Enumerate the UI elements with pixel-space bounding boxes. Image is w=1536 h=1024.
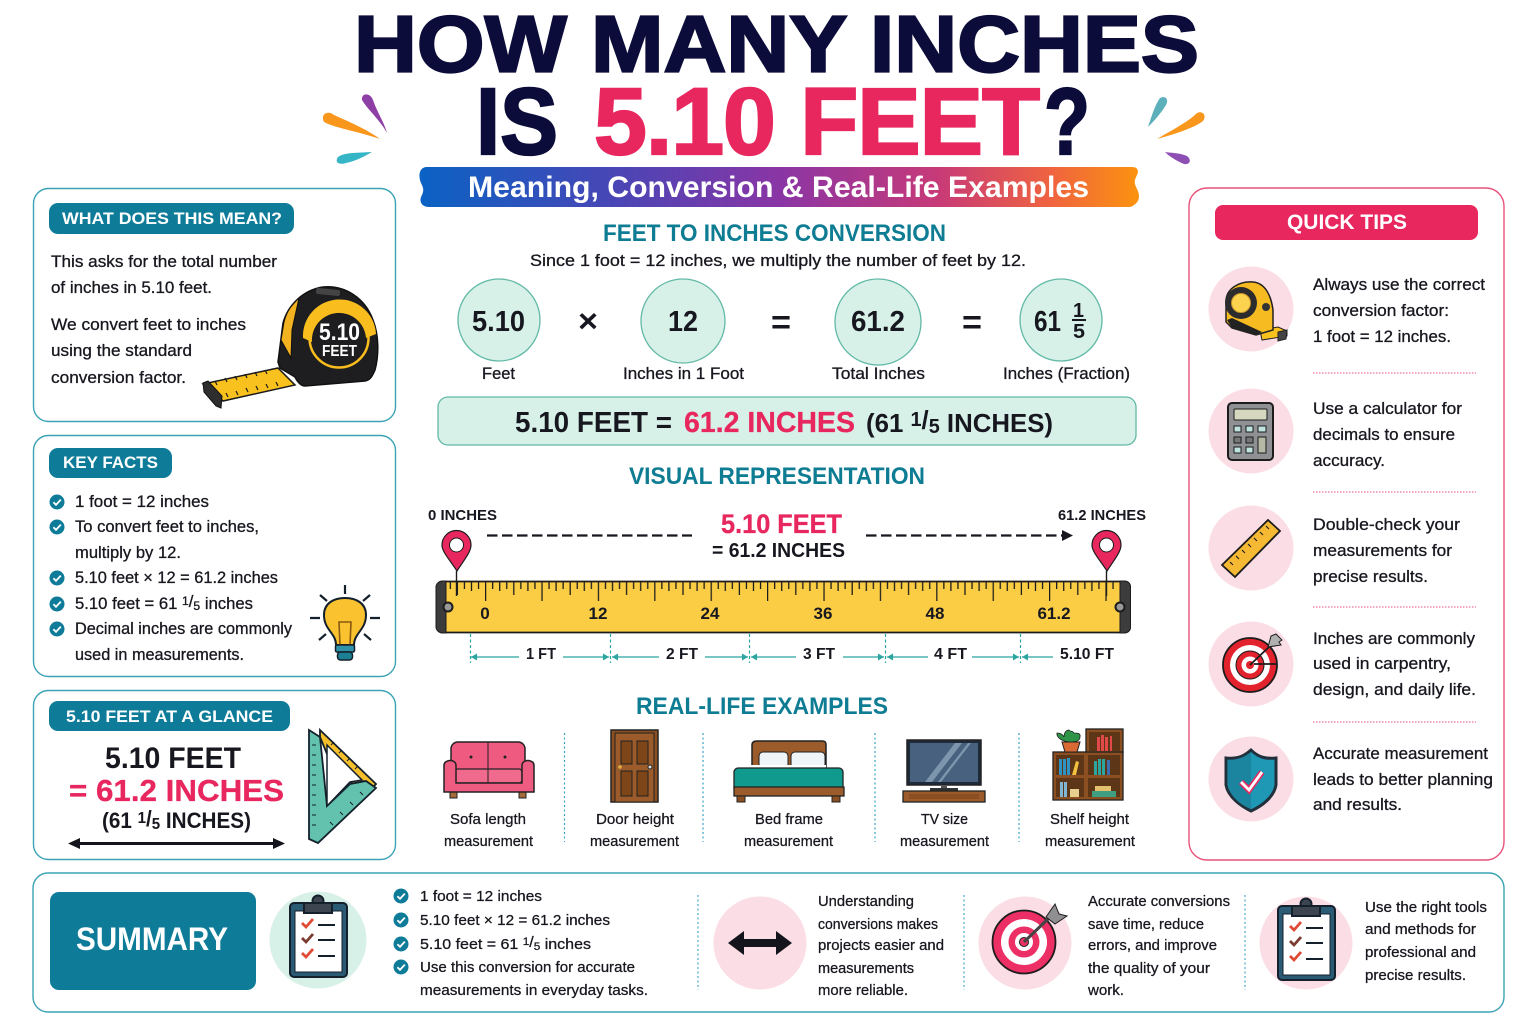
foot markers: 4 FT <box>934 646 967 663</box>
panel: key facts: 5.10 feet × 12 = 61.2 inches <box>75 569 278 587</box>
real-life examples row: measurement <box>744 833 834 850</box>
equation row: 5 <box>1073 321 1085 343</box>
summary checklist: Use this conversion for accurate <box>420 959 635 976</box>
panel: key facts: Decimal inches are commonly <box>75 620 293 638</box>
tip text 1: 1 foot = 12 inches. <box>1313 328 1451 346</box>
panel: at a glance <box>34 690 396 860</box>
title: ? <box>1044 69 1090 175</box>
summary checklist: 1 <box>523 936 529 948</box>
tip text 2 <box>1313 400 1463 470</box>
equation row: 12 <box>668 306 698 338</box>
heading: real-life examples: REAL-LIFE EXAMPLES <box>636 693 888 720</box>
tip text 5: leads to better planning <box>1313 771 1493 789</box>
icon: clipboard <box>270 892 366 988</box>
summary text: accuracy: the quality of your <box>1088 960 1210 977</box>
panel: quick tips: QUICK TIPS <box>1287 211 1407 234</box>
panel: what does this mean: conversion factor. <box>51 369 186 387</box>
summary checklist <box>394 888 648 999</box>
result banner: / <box>922 405 929 435</box>
tip text 3: Double-check your <box>1313 516 1461 534</box>
title: IS <box>476 69 558 175</box>
foot markers: 5.10 FT <box>1060 646 1114 663</box>
panel: key facts: / <box>189 593 194 611</box>
real-life examples row: measurement <box>900 833 990 850</box>
tip text 4: used in carpentry, <box>1313 655 1451 673</box>
icon: target <box>978 896 1072 990</box>
tip text 3: precise results. <box>1313 568 1428 586</box>
panel: at a glance: = 61.2 INCHES <box>69 773 284 808</box>
title: HOW MANY INCHES <box>354 0 1199 88</box>
panel: summary: SUMMARY <box>76 921 228 957</box>
icon: sofa <box>444 742 534 798</box>
result banner: 61.2 INCHES <box>684 407 855 439</box>
real-life examples row: Shelf height <box>1050 811 1130 828</box>
real-life examples row: Bed frame <box>755 811 823 828</box>
tip text 4: design, and daily life. <box>1313 681 1476 699</box>
summary checklist: 5.10 feet = 61 <box>420 936 512 953</box>
summary text: conversions: projects easier and <box>818 937 944 954</box>
ruler bar: 36 <box>814 604 832 623</box>
summary text: conversions: measurements <box>818 960 914 977</box>
tip 1 <box>1208 266 1294 352</box>
real-life examples row <box>444 729 1136 850</box>
heading: visual representation: VISUAL REPRESENTATION <box>629 463 925 490</box>
summary text: tools: professional and <box>1365 944 1476 961</box>
conversion explanation: Since 1 foot = 12 inches, we multiply the number of feet by 12. <box>530 252 1026 270</box>
result banner: (61 <box>866 408 904 438</box>
icon: clipboard 2 <box>1260 896 1352 990</box>
equation row: Inches (Fraction) <box>1003 365 1130 383</box>
icon: light bulb <box>310 585 380 660</box>
summary text: conversions: Understanding <box>818 893 914 910</box>
tip text 2: Use a calculator for <box>1313 400 1463 418</box>
tip text 5 <box>1313 745 1493 814</box>
panel: key facts: used in measurements. <box>75 646 244 664</box>
tip text 4 <box>1313 630 1476 699</box>
summary checklist: 5 <box>534 941 540 953</box>
summary text: accuracy: Accurate conversions <box>1088 893 1230 910</box>
foot markers: 3 FT <box>803 646 835 663</box>
panel: key facts: 1 foot = 12 inches <box>75 493 209 511</box>
tip 3 <box>1208 506 1294 590</box>
summary text: conversions: conversions makes <box>818 916 938 933</box>
subtitle ribbon: Meaning, Conversion & Real-Life Examples <box>468 171 1089 204</box>
equation row <box>458 279 1130 383</box>
panel: key facts: To convert feet to inches, <box>75 518 259 536</box>
ruler diagram: 61.2 INCHES <box>1058 507 1146 524</box>
summary text: accuracy <box>1087 893 1230 999</box>
panel: at a glance: INCHES) <box>160 808 251 833</box>
summary text: accuracy: work. <box>1087 982 1124 999</box>
real-life examples row: Sofa length <box>450 811 526 828</box>
panel: key facts: 1 <box>182 594 189 608</box>
summary text: tools: precise results. <box>1365 967 1466 984</box>
real-life examples row: TV size <box>921 811 968 828</box>
title <box>354 0 1199 175</box>
equation row: 61 <box>1034 306 1061 338</box>
tip text 2: decimals to ensure <box>1313 426 1455 444</box>
ruler bar: 0 <box>480 604 490 623</box>
panel: key facts: KEY FACTS <box>63 453 158 472</box>
result banner: 5.10 FEET = <box>515 407 672 439</box>
panel: what does this mean: This asks for the total number <box>51 253 278 271</box>
tip 4 <box>1208 622 1294 706</box>
equation row: 5.10 <box>472 306 525 338</box>
result banner: 1 <box>910 409 922 431</box>
tip text 5: and results. <box>1313 796 1402 814</box>
panel: at a glance: 5.10 FEET <box>105 742 241 775</box>
icon: door <box>611 730 658 802</box>
ruler bar: 24 <box>701 604 720 623</box>
icon: tape measure: FEET <box>322 343 357 360</box>
equation row: = <box>962 304 982 340</box>
double arrow <box>68 838 285 849</box>
panel: quick tips <box>1189 188 1504 860</box>
tip text 2: accuracy. <box>1313 452 1385 470</box>
summary checklist: measurements in everyday tasks. <box>420 982 648 999</box>
panel: key facts: multiply by 12. <box>75 544 181 562</box>
summary checklist: / <box>529 934 535 951</box>
summary text: tools <box>1365 899 1487 984</box>
equation row: Total Inches <box>832 365 925 383</box>
equation row: = <box>771 304 791 340</box>
icon: bookshelf <box>1053 729 1123 800</box>
ruler bar: 48 <box>926 604 944 623</box>
equation row: Inches in 1 Foot <box>623 365 744 383</box>
heading: feet to inches conversion: FEET TO INCHES CONVERSION <box>603 220 946 247</box>
equation row: 61.2 <box>851 306 905 338</box>
icon: set square <box>309 730 376 843</box>
tip 5 <box>1208 736 1294 822</box>
panel: what does this mean <box>34 188 396 422</box>
result banner <box>438 397 1136 445</box>
icon: tv <box>903 740 985 802</box>
tip text 3: measurements for <box>1313 542 1453 560</box>
tip text 3 <box>1313 516 1461 586</box>
real-life examples row: Door height <box>596 811 675 828</box>
tip text 1 <box>1313 276 1485 346</box>
summary checklist: 1 foot = 12 inches <box>420 888 542 905</box>
panel: what does this mean: We convert feet to inches <box>51 316 246 334</box>
result banner: INCHES) <box>940 408 1053 438</box>
summary text: tools: and methods for <box>1365 921 1476 938</box>
ruler diagram: 5.10 FEET <box>721 509 842 539</box>
foot markers: 1 FT <box>526 646 556 663</box>
foot markers <box>470 634 1114 663</box>
icon: end pin <box>1092 530 1121 596</box>
summary text: conversions: more reliable. <box>818 982 908 999</box>
panel: at a glance: / <box>146 806 152 831</box>
panel: at a glance: 1 <box>138 810 146 827</box>
tip text 4: Inches are commonly <box>1313 630 1476 648</box>
real-life examples row: measurement <box>444 833 534 850</box>
icon: tape measure <box>203 287 378 408</box>
panel: at a glance: 5.10 FEET AT A GLANCE <box>66 707 273 726</box>
panel: what does this mean: using the standard <box>51 342 192 360</box>
equation row: Feet <box>482 365 515 383</box>
icon: tape measure: 5.10 <box>319 319 360 346</box>
ruler diagram: 0 INCHES <box>428 507 497 524</box>
real-life examples row: measurement <box>1045 833 1136 850</box>
summary checklist: inches <box>540 936 591 953</box>
summary checklist: 5.10 feet × 12 = 61.2 inches <box>420 912 610 929</box>
equation row: × <box>578 303 598 339</box>
panel: key facts <box>34 436 396 676</box>
ruler diagram <box>428 507 1146 663</box>
ruler diagram: = 61.2 INCHES <box>712 540 845 562</box>
icon: double arrow <box>714 896 806 990</box>
tip text 1: conversion factor: <box>1313 302 1449 320</box>
ruler bar <box>436 581 1130 633</box>
summary text: tools: Use the right tools <box>1365 899 1487 916</box>
panel: what does this mean: of inches in 5.10 feet. <box>51 279 212 297</box>
summary text: conversions <box>818 893 944 999</box>
panel: key facts: inches <box>200 595 253 613</box>
summary text: accuracy: save time, reduce <box>1088 916 1204 933</box>
tip text 1: Always use the correct <box>1313 276 1485 294</box>
ruler bar: 61.2 <box>1037 604 1071 623</box>
icon: start pin <box>442 530 471 596</box>
panel: key facts: 5 <box>193 599 201 613</box>
tip 2 <box>1208 388 1294 474</box>
result banner: 5 <box>929 416 940 438</box>
decorative bursts <box>323 94 1205 164</box>
panel: summary <box>33 873 1504 1012</box>
equation row: 1 <box>1073 300 1084 322</box>
title: 5.10 FEET <box>594 69 1040 175</box>
icon: bed <box>734 741 844 802</box>
summary text: accuracy: errors, and improve <box>1088 937 1217 954</box>
ruler bar: 12 <box>589 604 607 623</box>
panel: at a glance: 5 <box>152 816 160 833</box>
foot markers: 2 FT <box>666 646 698 663</box>
real-life examples row: measurement <box>590 833 680 850</box>
tip text 5: Accurate measurement <box>1313 745 1488 763</box>
panel: at a glance: (61 <box>102 808 134 833</box>
panel: key facts: 5.10 feet = 61 <box>75 595 176 613</box>
panel: what does this mean: WHAT DOES THIS MEAN? <box>62 209 282 228</box>
